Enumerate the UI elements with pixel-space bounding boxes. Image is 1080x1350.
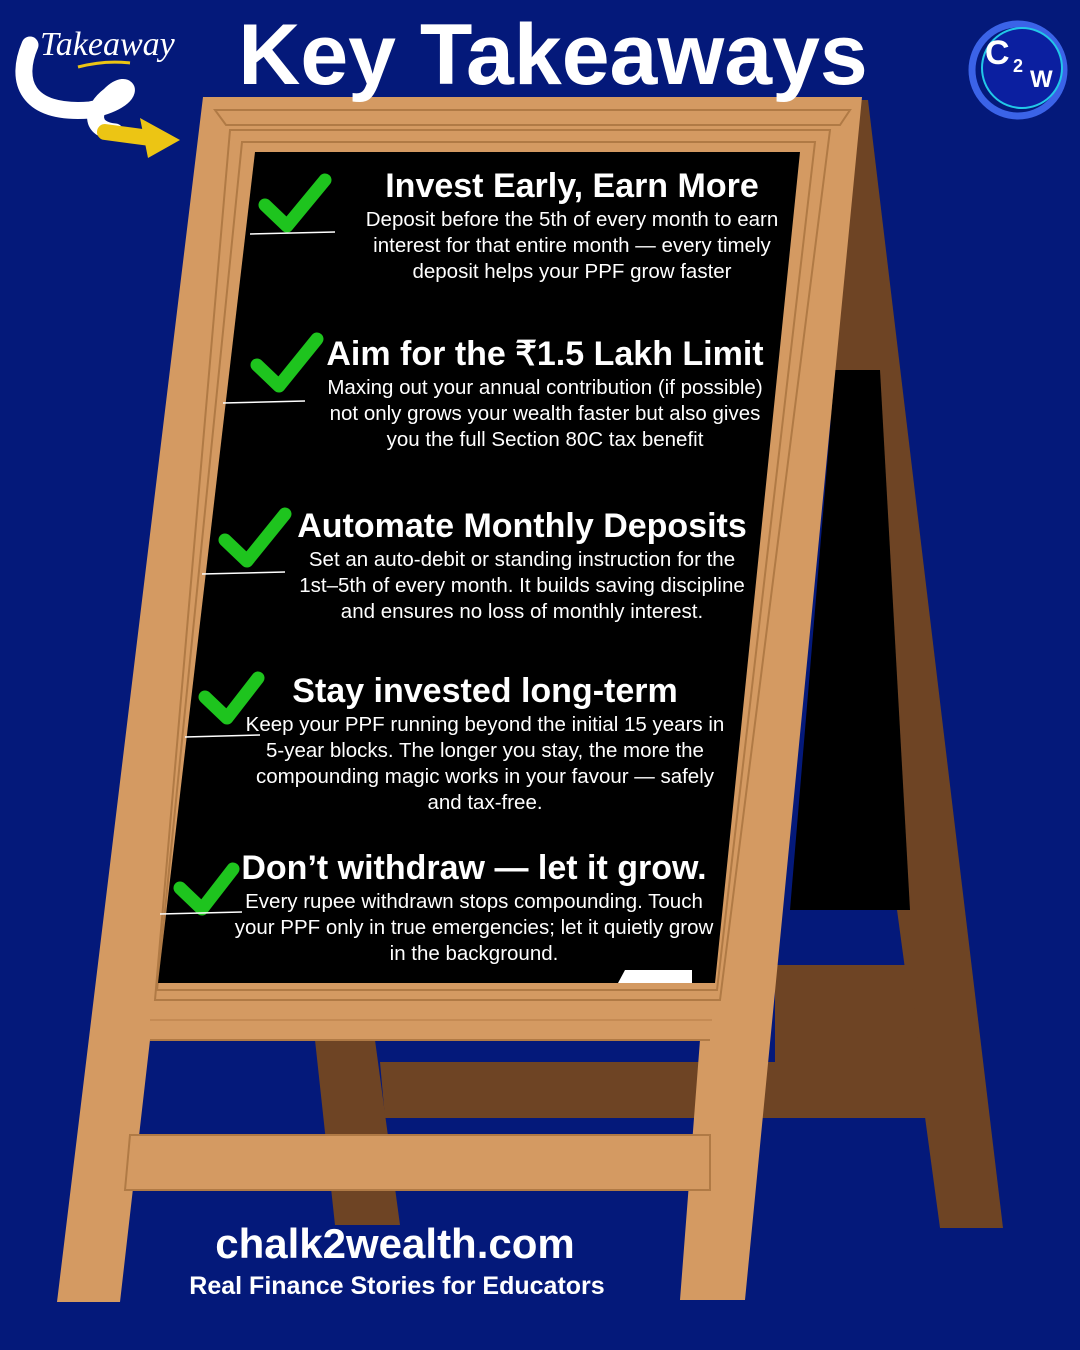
- item 3: and ensures no loss of monthly interest.: [341, 600, 703, 623]
- title: Key Takeaways: [238, 7, 868, 103]
- c2w logo: W: [1030, 66, 1053, 93]
- item 3: 1st–5th of every month. It builds saving discipline: [299, 574, 745, 597]
- item 4: 5-year blocks. The longer you stay, the more the: [266, 739, 704, 762]
- item 1: deposit helps your PPF grow faster: [412, 260, 732, 283]
- item 4: Stay invested long-term: [292, 672, 678, 710]
- item 2: you the full Section 80C tax benefit: [387, 428, 703, 451]
- item 5: [234, 849, 714, 965]
- takeaway logo: Takeaway: [40, 26, 176, 63]
- item 2: [326, 335, 764, 451]
- item 2: Maxing out your annual contribution (if possible): [327, 376, 763, 399]
- c2w logo: [972, 24, 1064, 116]
- item 3: Automate Monthly Deposits: [297, 507, 747, 545]
- item 5: in the background.: [390, 942, 558, 965]
- item 3: [297, 507, 747, 623]
- item 4: [246, 672, 724, 814]
- item 4: compounding magic works in your favour — safely: [256, 765, 714, 788]
- item 5: your PPF only in true emergencies; let it quietly grow: [235, 916, 713, 939]
- item 1: [366, 167, 778, 283]
- c2w logo: 2: [1013, 56, 1023, 76]
- c2w logo: C: [985, 34, 1010, 72]
- item 1: interest for that entire month — every timely: [373, 234, 771, 257]
- item 3: Set an auto-debit or standing instruction for the: [309, 548, 735, 571]
- item 1: Invest Early, Earn More: [385, 167, 759, 205]
- item 2: Aim for the ₹1.5 Lakh Limit: [326, 335, 764, 373]
- footer url: chalk2wealth.com: [215, 1220, 575, 1267]
- chalkboard: [158, 152, 800, 983]
- item 2: not only grows your wealth faster but also gives: [330, 402, 760, 425]
- item 1: Deposit before the 5th of every month to earn: [366, 208, 778, 231]
- chalk eraser: [618, 970, 692, 983]
- front frame: [57, 97, 862, 1302]
- takeaway logo: [24, 26, 180, 158]
- item 4: and tax-free.: [427, 791, 543, 814]
- item 5: Don’t withdraw — let it grow.: [241, 849, 707, 887]
- item 4: Keep your PPF running beyond the initial 15 years in: [246, 713, 724, 736]
- item 5: Every rupee withdrawn stops compounding. Touch: [245, 890, 703, 913]
- back easel: [315, 100, 1003, 1228]
- checkmarks: [180, 180, 325, 909]
- footer tagline: Real Finance Stories for Educators: [189, 1272, 605, 1300]
